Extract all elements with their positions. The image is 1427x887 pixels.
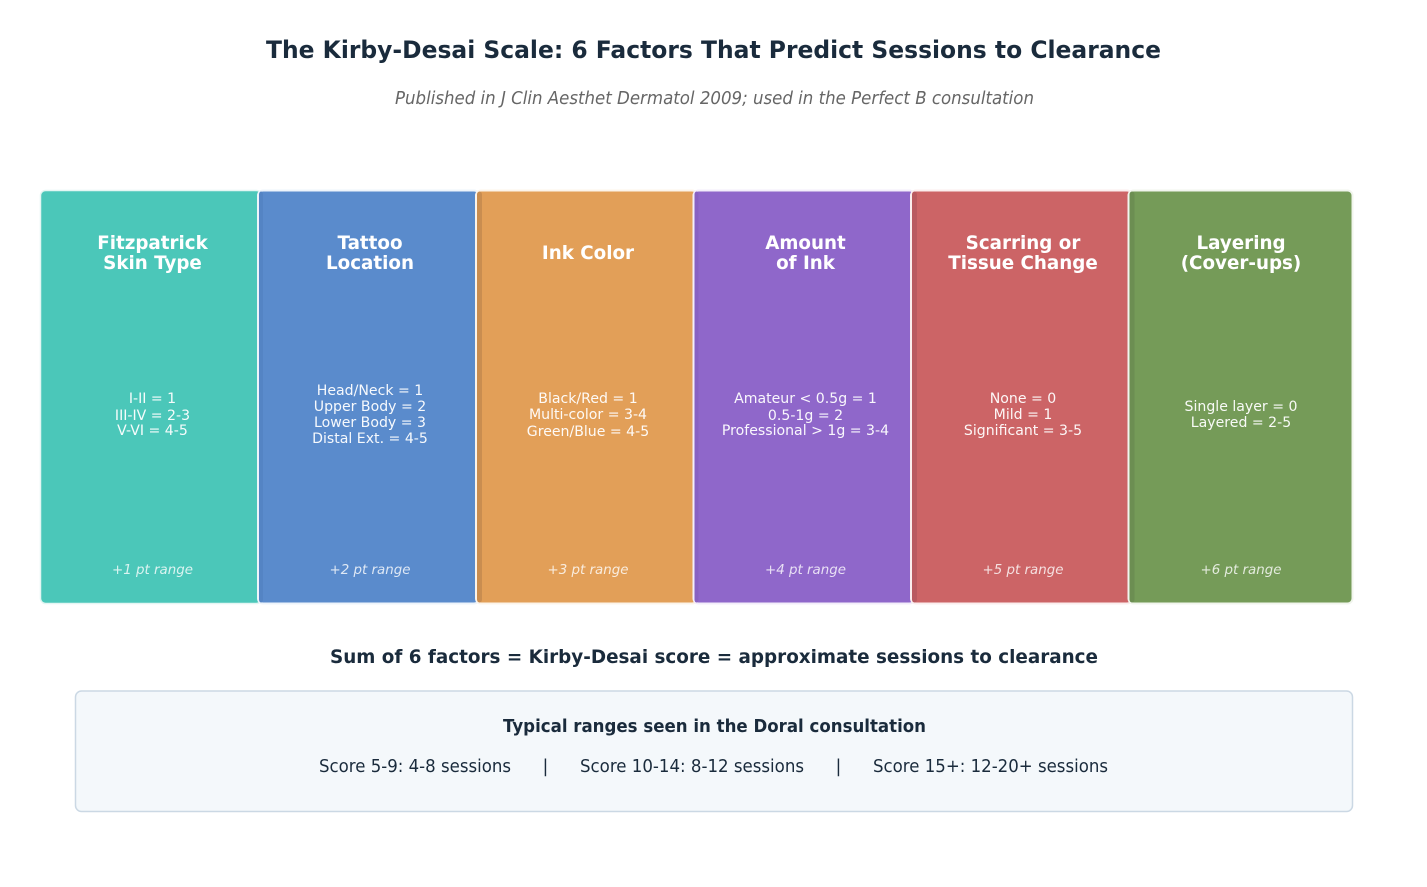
text: location scores: Distal Ext. = 4-5 [312,431,428,447]
text: scarring scores: Significant = 3-5 [964,423,1082,439]
accent strip: Amount of Ink [694,192,698,602]
panel: Fitzpatrick Skin Type [40,190,262,604]
text: amount scores: Professional > 1g = 3-4 [722,423,889,439]
text: ink range: +3 pt range [548,563,628,578]
heading: Layering (Cover-ups): (Cover-ups) [1181,253,1301,274]
heading: typical ranges: Typical ranges seen in the Doral consultation [503,717,926,737]
text: amount scores: Amateur < 0.5g = 1 [734,391,877,407]
heading: Layering (Cover-ups): Layering [1196,233,1286,254]
text: Fitzpatrick scores: I-II = 1 [129,391,176,407]
text: scarring scores: Mild = 1 [994,407,1052,423]
panel: Amount of Ink [694,190,914,604]
text: score ranges: | [836,757,841,777]
heading: Tattoo Location: Tattoo [337,233,403,254]
text: location range: +2 pt range [330,563,410,578]
heading: Ink Color: Ink Color [542,243,634,264]
text: location scores: Head/Neck = 1 [317,383,423,399]
text: score ranges: | [542,757,548,777]
text: scarring range: +5 pt range [983,563,1063,578]
text: ink scores: Green/Blue = 4-5 [527,424,649,440]
formula statement: Sum of 6 factors = Kirby-Desai score = approximate sessions to clearance [330,647,1098,668]
accent strip: Ink Color [477,192,482,602]
text: ink scores: Multi-color = 3-4 [529,407,647,423]
title: The Kirby-Desai Scale: 6 Factors That Predict Sessions to Clearance [266,36,1161,64]
accent strip: Layering [1130,192,1134,602]
heading: Amount of Ink: Amount [765,233,846,254]
text: amount range: +4 pt range [765,563,846,578]
panel: Layering (Cover-ups) [1128,190,1352,604]
text: scarring scores: None = 0 [990,391,1056,407]
text: Fitzpatrick scores: III-IV = 2-3 [115,408,190,424]
text: amount scores: 0.5-1g = 2 [768,408,843,424]
text: ink scores: Black/Red = 1 [538,391,638,407]
heading: Amount of Ink: of Ink [776,253,836,274]
heading: Fitzpatrick Skin Type: Skin Type [103,253,202,274]
text: score ranges [319,757,1108,777]
heading: Tattoo Location: Location [326,253,414,274]
panel: typical ranges [76,691,1352,812]
text: Fitzpatrick range: +1 pt range [112,563,193,578]
text: layering scores: Single layer = 0 [1185,399,1297,415]
heading: Scarring or Tissue Change: Scarring or [966,233,1080,254]
text: location scores: Upper Body = 2 [314,399,426,415]
text: score ranges: Score 10-14: 8-12 sessions [580,757,804,777]
accent strip: Scarring [912,192,917,602]
text: layering range: +6 pt range [1201,563,1281,578]
text: score ranges: Score 5-9: 4-8 sessions [319,757,511,777]
panel: Tattoo Location [258,190,479,604]
subtitle: Published in J Clin Aesthet Dermatol 2009; used in the Perfect B consultation [395,89,1034,109]
accent strip: Tattoo Location [259,192,263,602]
text: location scores: Lower Body = 3 [314,415,426,431]
text: layering scores: Layered = 2-5 [1191,415,1291,431]
panel: Scarring or Tissue Change [911,190,1132,604]
text: score ranges: Score 15+: 12-20+ sessions [873,757,1108,777]
panel: Ink Color [476,190,697,604]
heading: Scarring or Tissue Change: Tissue Change [948,253,1098,274]
heading: Fitzpatrick Skin Type: Fitzpatrick [97,233,209,254]
text: Fitzpatrick scores: V-VI = 4-5 [117,423,188,439]
